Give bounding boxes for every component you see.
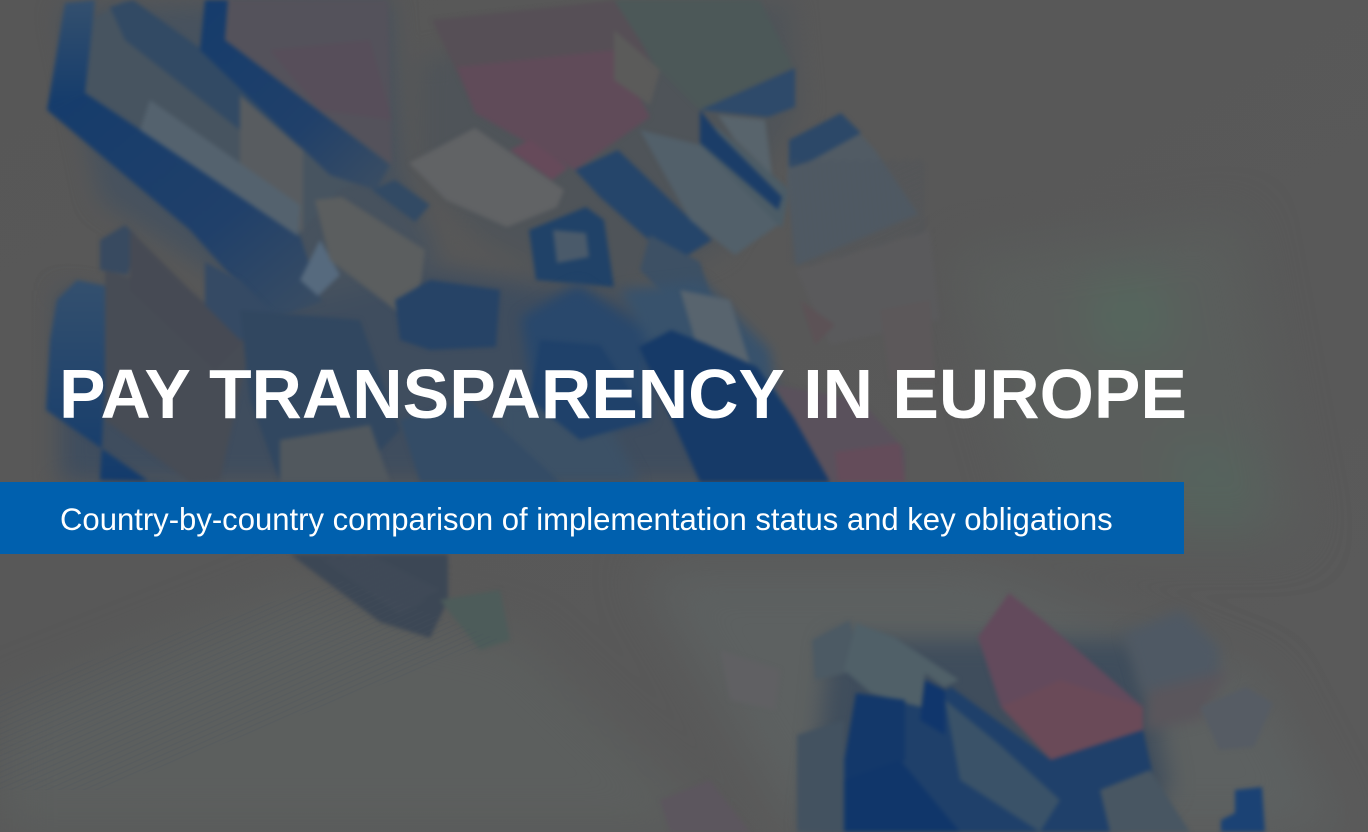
right block [787,113,940,380]
soft tonal areas [0,220,1340,832]
lower-right blocks [1124,610,1230,730]
top-left blocks [47,0,430,320]
subtitle band [0,482,1184,554]
top-centre blocks [409,0,795,320]
striped lines lower left [290,554,510,650]
centre blue cluster [500,280,780,482]
title: PAY TRANSPARENCY IN EUROPE [59,355,1187,433]
subtitle text: Country-by-country comparison of implementation status and key obligations [60,502,1113,537]
bottom-left block group [46,225,500,482]
